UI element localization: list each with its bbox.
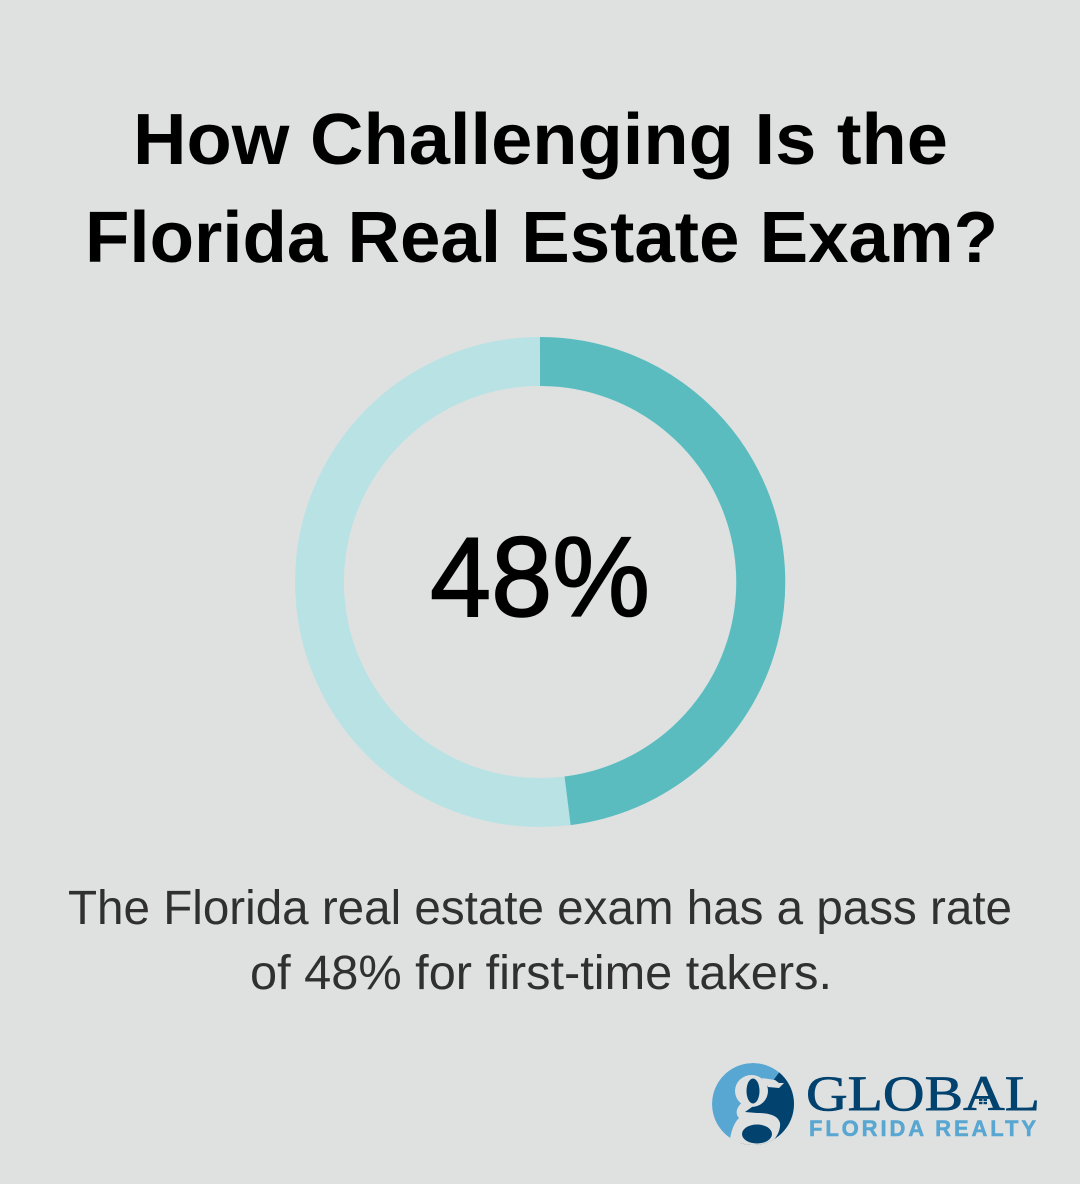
description text xyxy=(68,882,1012,1000)
title: How Challenging Is the xyxy=(133,100,948,180)
logo: Global Florida Realty xyxy=(712,1063,1040,1150)
description text: of 48% for first-time takers. xyxy=(250,947,832,1000)
infographic canvas xyxy=(69,112,1037,1145)
wordmark: GLOBAL: GLOBAL xyxy=(806,1065,1040,1121)
title xyxy=(85,100,998,278)
donut chart: 48% xyxy=(320,361,761,802)
title: Florida Real Estate Exam? xyxy=(85,198,998,278)
icon: g monogram xyxy=(712,1063,794,1145)
description text: The Florida real estate exam has a pass rate xyxy=(68,882,1012,935)
icon: house window xyxy=(979,1099,987,1104)
donut value: 48% xyxy=(430,514,650,640)
wordmark: FLORIDA REALTY: FLORIDA REALTY xyxy=(809,1116,1036,1141)
